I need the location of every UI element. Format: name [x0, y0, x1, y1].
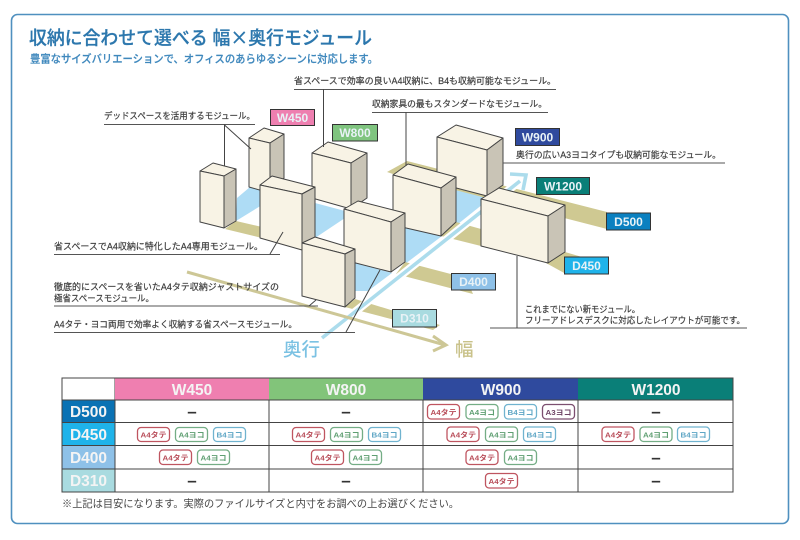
paper size pills: W800 D450: A4タテ	[296, 430, 322, 440]
paper size pills: W900 D450: B4ヨコ	[526, 430, 552, 440]
row header: D400	[62, 446, 115, 469]
paper size pills: W800 D400	[312, 450, 382, 464]
paper size pill: W900 D310	[486, 474, 518, 488]
column header: W1200	[578, 378, 733, 400]
module box W800 D450	[260, 176, 315, 250]
callout: new module	[490, 256, 747, 328]
column header: W900	[423, 378, 578, 400]
tag: W900	[516, 128, 560, 146]
paper size pills: W900 D400: A4タテ	[469, 452, 495, 462]
paper size pills: W900 D450: A4ヨコ	[488, 430, 514, 440]
callout: new module: これまでにない新モジュール。	[525, 304, 640, 314]
paper size pill: W900 D310: A4タテ	[488, 476, 514, 486]
callout: A4 portrait and landscape module: A4タテ・ヨコ両用で効率よく収納する省スペースモジュール。	[54, 318, 297, 330]
paper size pills: W900 D450	[447, 427, 556, 442]
unavailable dashes	[187, 402, 661, 490]
arrow: depth	[322, 174, 526, 338]
paper size pills: W900 D500: A4ヨコ	[469, 408, 495, 417]
tag: D400	[452, 274, 496, 290]
table grid	[115, 400, 733, 492]
row header: D310: D310	[70, 473, 107, 490]
subtitle: 豊富なサイズバリエーションで、オフィスのあらゆるシーンに対応します。	[30, 52, 378, 66]
paper size pills: W800 D450	[292, 428, 400, 442]
tag: D450	[564, 257, 608, 274]
column header: W800	[269, 378, 423, 400]
unavailable dashes: –	[651, 402, 661, 421]
row header: D450	[62, 422, 115, 446]
paper size pills: W800 D400: A4ヨコ	[352, 454, 378, 462]
unavailable dashes: –	[651, 471, 661, 490]
tag: W450: W450	[277, 111, 308, 125]
row header: D400: D400	[70, 450, 107, 467]
paper size pills: W450 D400	[160, 450, 230, 464]
paper size pills: W900 D500	[428, 404, 574, 419]
row header: D310	[62, 469, 115, 492]
callout: ultra space saving module: 極省スペースモジュール。	[54, 292, 154, 304]
axis label: width: 幅	[455, 339, 474, 360]
callout: ultra space saving module: 徹底的にスペースを省いたA4タテ収納ジャストサイズの	[54, 281, 279, 292]
row header: D500: D500	[70, 404, 107, 421]
callout: ultra space saving module	[54, 281, 318, 306]
tag: W1200	[536, 178, 590, 194]
unavailable dashes: –	[187, 402, 197, 421]
row header: D500	[62, 400, 115, 422]
tag: D310	[392, 310, 436, 327]
paper size pills: W450 D400: A4ヨコ	[200, 454, 226, 462]
unavailable dashes: –	[651, 448, 661, 467]
module box W900 D500	[437, 125, 503, 196]
unavailable dashes: –	[341, 471, 351, 490]
column header: W800: W800	[326, 382, 366, 399]
paper size pills: W800 D400: A4タテ	[314, 452, 340, 462]
tag: W450	[270, 110, 314, 126]
module box W1200 D450	[481, 188, 565, 263]
paper size pills: W900 D500: A4タテ	[430, 407, 456, 417]
paper size pills: W900 D450: A4タテ	[450, 430, 476, 440]
callout: A3 module: 奥行の広いA3ヨコタイプも収納可能なモジュール。	[516, 149, 721, 160]
callout: A4 portrait and landscape module	[54, 270, 380, 332]
module box W450 D500	[249, 128, 284, 193]
module box W450 D400	[200, 163, 236, 228]
paper size pills: W450 D400: A4タテ	[162, 452, 188, 462]
callout: A4 dedicated module	[54, 232, 283, 254]
paper size pills: W450 D450	[138, 428, 246, 442]
tag: D450: D450	[572, 259, 601, 273]
tag: W1200: W1200	[544, 180, 582, 194]
unavailable dashes: –	[341, 402, 351, 421]
paper size pills: W1200 D450: A4ヨコ	[643, 430, 669, 440]
tag: D500: D500	[614, 215, 643, 229]
table top edge	[62, 378, 733, 400]
column header: W450: W450	[172, 382, 212, 399]
size table	[62, 378, 733, 492]
paper size pills: W1200 D450	[602, 427, 710, 442]
row header: D450: D450	[70, 427, 107, 444]
tag: D500	[606, 213, 650, 230]
paper size pills: W900 D500: A3ヨコ	[546, 408, 572, 417]
column header: W1200: W1200	[631, 382, 681, 399]
callout: A4 dedicated module: 省スペースでA4収納に特化したA4専用モジュール。	[54, 240, 263, 252]
tag: D400: D400	[459, 275, 488, 289]
table corner cell	[62, 378, 115, 400]
paper size pills: W800 D450: B4ヨコ	[372, 430, 398, 440]
callout: standard module: 収納家具の最もスタンダードなモジュール。	[372, 98, 547, 109]
module box W900 D450	[393, 164, 456, 236]
axis label: depth: 奥行	[283, 339, 320, 360]
module box W800 D500	[312, 142, 367, 209]
paper size pills: W450 D450: A4タテ	[140, 430, 166, 440]
callout: new module: フリーアドレスデスクに対応したレイアウトが可能です。	[525, 314, 745, 326]
module box W900 D400	[344, 201, 405, 272]
paper size pills: W1200 D450: B4ヨコ	[680, 430, 706, 440]
isometric module diagram	[187, 125, 607, 351]
unavailable dashes: –	[187, 471, 197, 490]
paper size pills: W900 D500: B4ヨコ	[508, 408, 534, 417]
footnote: ※上記は目安になります。実際のファイルサイズと内寸をお調べの上お選びください。	[62, 497, 459, 510]
paper size pills: W800 D450: A4ヨコ	[334, 430, 360, 440]
tag: W900: W900	[522, 130, 553, 144]
floor: light blue depth areas	[236, 187, 483, 291]
paper size pills: W450 D450: B4ヨコ	[216, 430, 242, 440]
arrow: width	[187, 272, 446, 351]
callout: dead space module: デッドスペースを活用するモジュール。	[104, 110, 255, 121]
column header: W450	[115, 378, 269, 400]
paper size pills: W900 D400	[466, 450, 536, 464]
tag: W800	[332, 124, 378, 141]
callout: A4 and B4 module: 省スペースで効率の良いA4収納に、B4も収納可能なモジュール。	[294, 75, 556, 86]
paper size pills: W900 D400: A4ヨコ	[508, 454, 534, 462]
paper size pills: W1200 D450: A4タテ	[605, 430, 631, 440]
paper size pills: W450 D450: A4ヨコ	[178, 430, 204, 440]
module box W900 D310	[302, 237, 355, 307]
tag: W800: W800	[339, 126, 371, 140]
callout: dead space module	[104, 110, 255, 166]
title: 収納に合わせて選べる 幅×奥行モジュール	[29, 24, 372, 50]
floor: olive width bands	[225, 161, 607, 330]
tag: D310: D310	[400, 312, 429, 326]
column header: W900: W900	[481, 382, 521, 399]
